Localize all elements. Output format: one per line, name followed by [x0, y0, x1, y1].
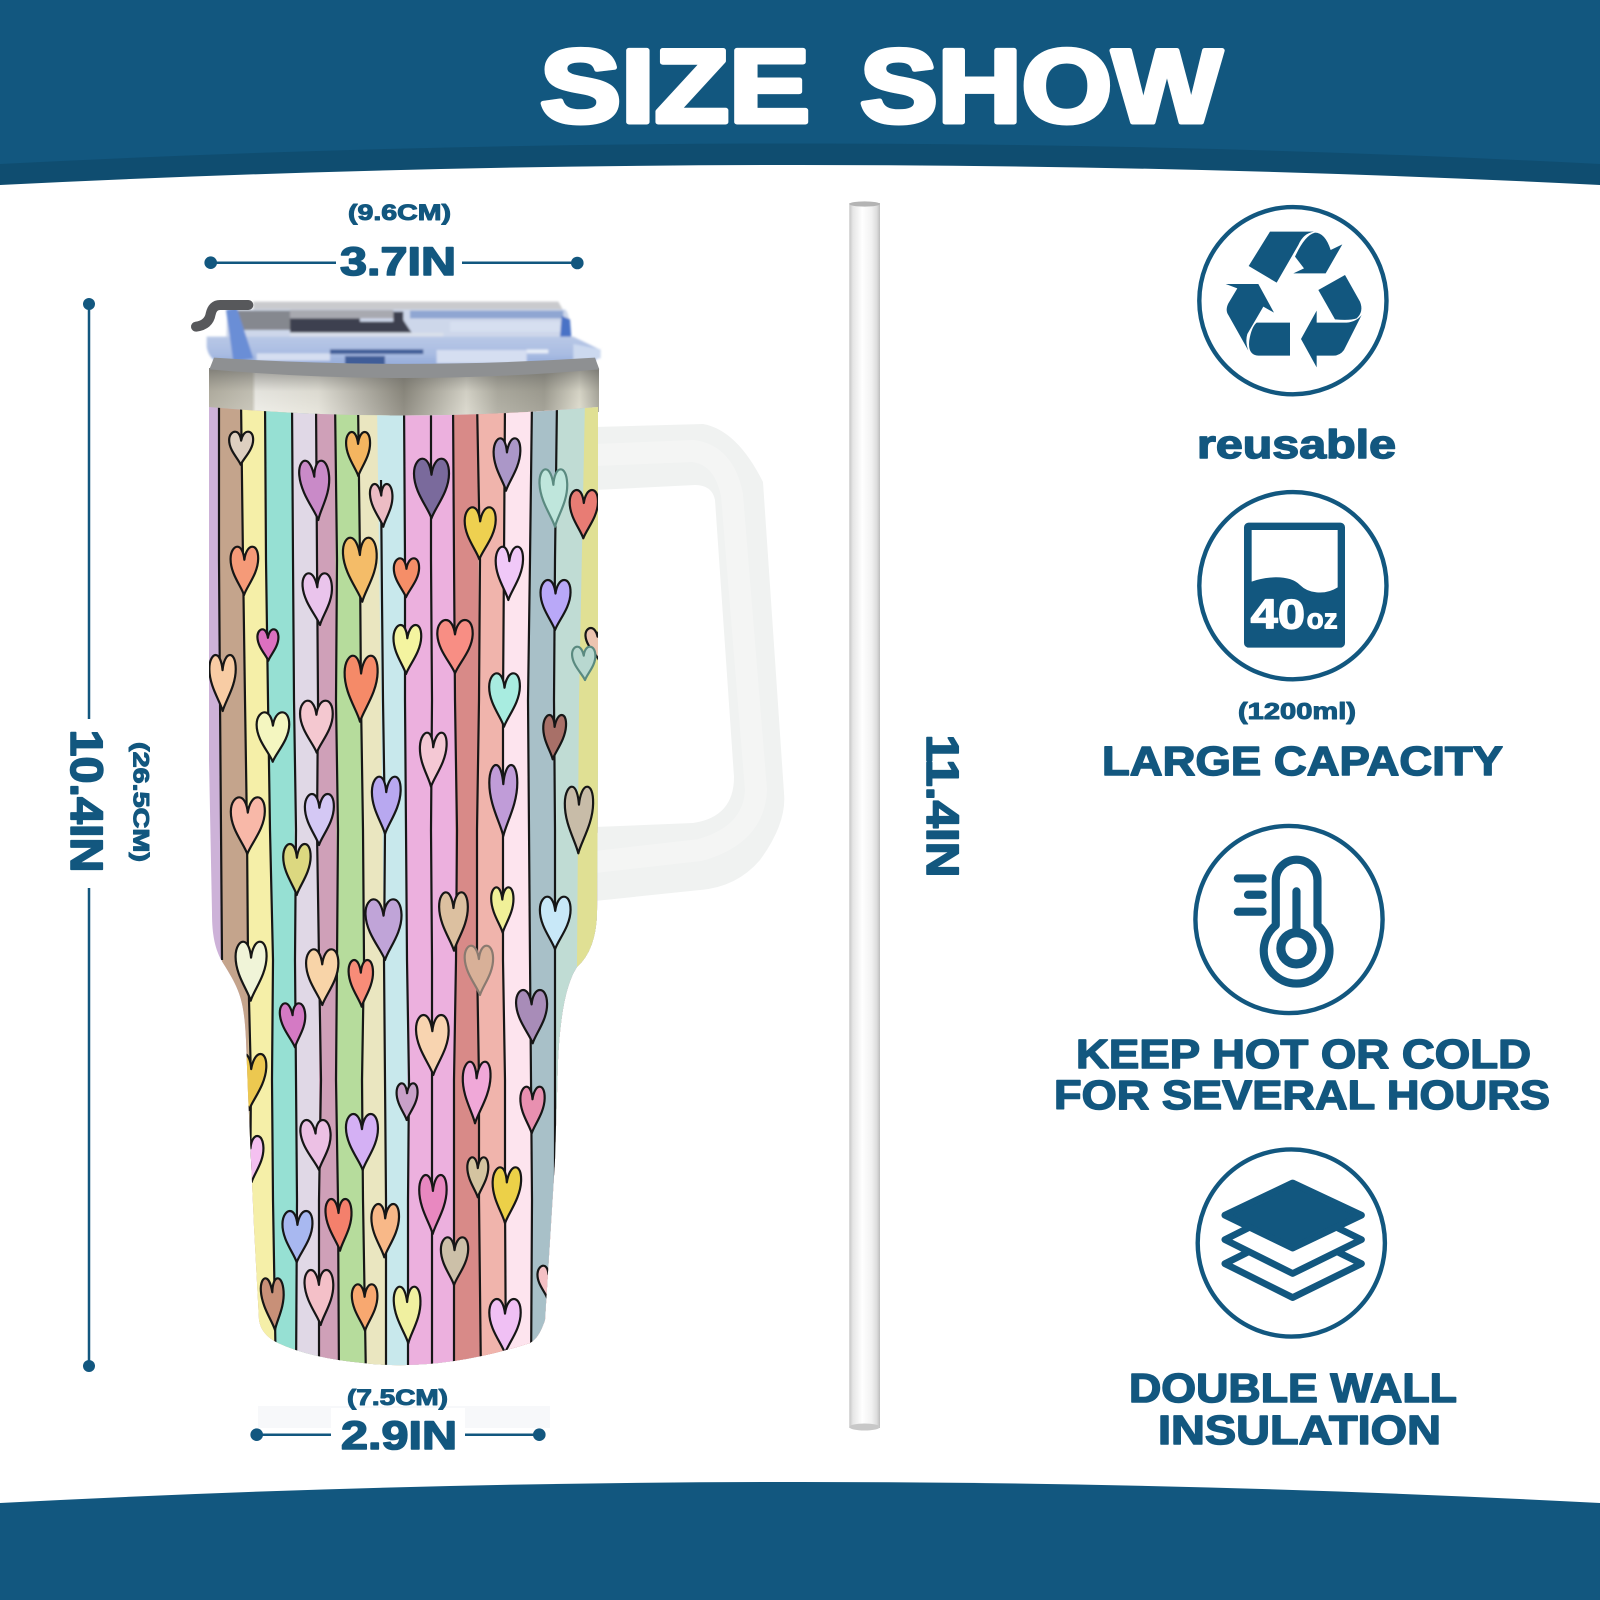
straw-colour stripes and string lines — [200, 395, 620, 1380]
icon: 40oz capacity: oz — [1307, 603, 1338, 635]
faint patch behind base dimension — [258, 1406, 550, 1428]
dimension: height: (26.5CM) — [128, 742, 154, 862]
tumbler — [196, 302, 620, 1380]
dimension: base width — [250, 1385, 546, 1458]
label: double wall insulation: INSULATION — [1158, 1407, 1441, 1453]
dimension: height — [61, 298, 154, 1372]
straw length label: 11.4IN — [917, 734, 968, 878]
label: large capacity: LARGE CAPACITY — [1102, 738, 1503, 784]
lid — [196, 302, 601, 378]
dimension: base width: 2.9IN — [341, 1414, 457, 1458]
label: reusable: reusable — [1197, 423, 1396, 467]
label: keep hot or cold: KEEP HOT OR COLD — [1076, 1031, 1531, 1077]
icon: 40oz capacity — [1199, 492, 1386, 679]
title: SHOW — [860, 29, 1223, 145]
icon: layers — [1198, 1149, 1385, 1337]
hearts — [209, 432, 611, 1353]
straw — [849, 201, 880, 1430]
steel band — [209, 368, 599, 420]
label: keep hot or cold: FOR SEVERAL HOURS — [1054, 1072, 1550, 1118]
footer band — [0, 1482, 1600, 1600]
dimension: top width: 3.7IN — [340, 240, 456, 284]
dimension: height: 10.4IN — [61, 730, 112, 872]
label: 1200ml: (1200ml) — [1238, 698, 1356, 724]
title — [540, 29, 1223, 145]
label: double wall insulation: DOUBLE WALL — [1129, 1365, 1457, 1411]
label: double wall insulation — [1129, 1365, 1457, 1453]
icon: recycle — [1199, 207, 1386, 394]
icon: 40oz capacity: 40 — [1251, 590, 1305, 637]
label: keep hot or cold — [1054, 1031, 1550, 1118]
handle — [595, 424, 784, 901]
title: SIZE — [540, 29, 810, 145]
header band — [0, 0, 1600, 185]
dimension: top width: (9.6CM) — [348, 200, 451, 225]
icon: thermometer — [1195, 826, 1383, 1013]
dimension: top width — [204, 200, 584, 284]
dimension: base width: (7.5CM) — [347, 1385, 448, 1410]
